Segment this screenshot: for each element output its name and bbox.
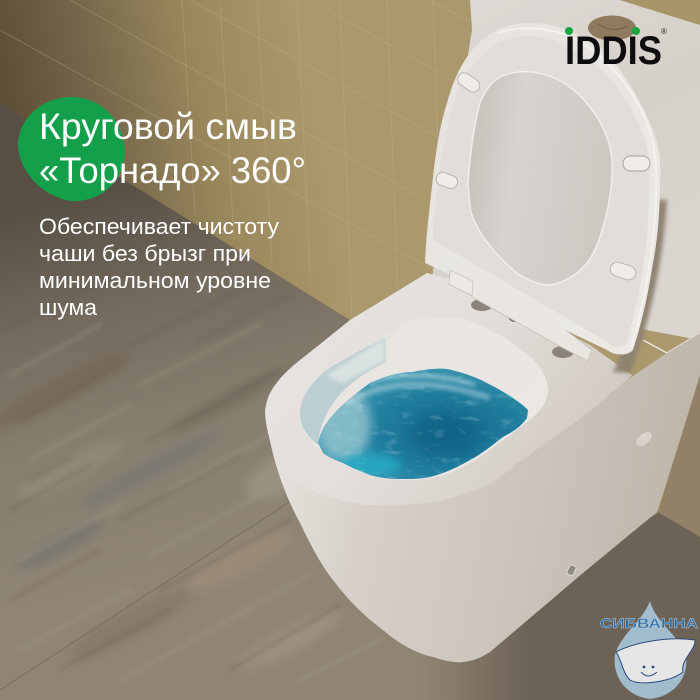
flush button bbox=[588, 16, 636, 40]
description: Обеспечивает чистоту bbox=[39, 214, 279, 239]
seat outer edge line bbox=[498, 28, 656, 347]
body drain plug bbox=[566, 564, 577, 576]
seat opening bbox=[468, 72, 612, 285]
side wall fixing cap bbox=[634, 429, 654, 449]
seat shadow on tank bbox=[613, 200, 667, 373]
watermark Сибванна bbox=[600, 601, 698, 699]
wall lower right bbox=[658, 375, 700, 537]
raised toilet seat lid bbox=[425, 23, 660, 354]
seat bumper middle right bbox=[623, 156, 650, 171]
seat bumper bottom right bbox=[608, 260, 638, 282]
IDDIS logo: ® bbox=[661, 27, 667, 36]
wall corner top right bbox=[620, 0, 700, 25]
toilet rim and deck bbox=[265, 273, 632, 505]
toilet body bbox=[268, 333, 700, 662]
watermark Сибванна: СИБВАННА bbox=[600, 615, 698, 631]
green circle bbox=[18, 97, 125, 201]
bowl interior bbox=[299, 318, 548, 480]
description bbox=[39, 214, 279, 320]
swirling water bbox=[318, 368, 528, 479]
bowl left reflection bbox=[300, 338, 386, 445]
title: Круговой смыв bbox=[39, 106, 297, 147]
seat hinge bar bbox=[472, 283, 592, 361]
wall tile grid bbox=[0, 0, 700, 510]
description: шума bbox=[39, 295, 98, 320]
seat inner tray bbox=[433, 36, 650, 347]
description: чаши без брызг при bbox=[39, 241, 251, 266]
title bbox=[39, 106, 306, 191]
floor streaks bbox=[5, 275, 380, 680]
description: минимальном уровне bbox=[39, 268, 271, 293]
hinge mounts bbox=[471, 299, 574, 358]
seat bumper middle left bbox=[434, 171, 459, 190]
dark floor area at lower right bbox=[420, 512, 700, 700]
flush outlet slot bbox=[326, 338, 385, 383]
IDDIS logo: IDDIS bbox=[565, 29, 662, 73]
seat bumper top left bbox=[455, 70, 482, 95]
seat hinge block left bbox=[449, 270, 473, 296]
toilet tank bbox=[430, 0, 700, 340]
floor stone patches bbox=[0, 342, 349, 690]
title: «Торнадо» 360° bbox=[39, 150, 306, 191]
tank seam bbox=[643, 333, 700, 353]
